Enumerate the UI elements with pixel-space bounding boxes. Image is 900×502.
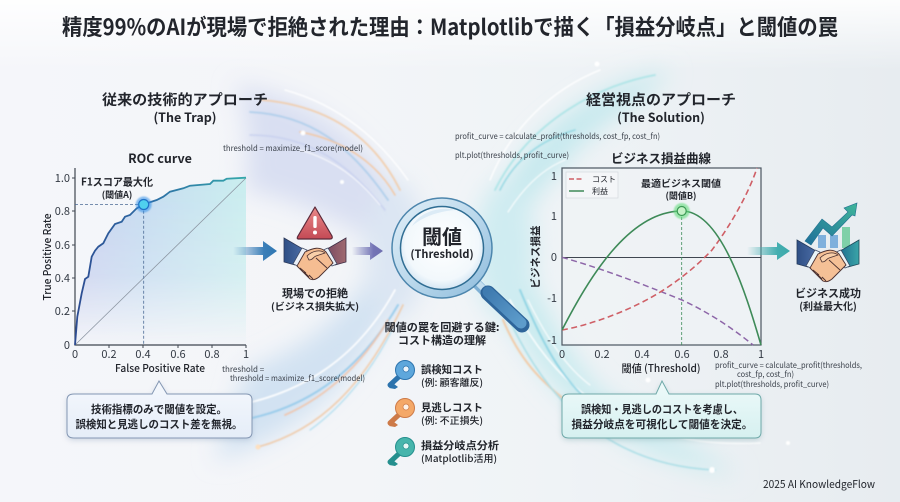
code note: threshold bottom: threshold = [222, 364, 265, 375]
arrow: to rejection [233, 241, 277, 261]
chart title: business profit curve: ビジネス損益曲線 [611, 148, 711, 167]
code note: profit top: profit_curve = calculate_profit(thresholds, cost_fp, cost_fn) [455, 131, 660, 142]
label: success: (利益最大化) [799, 298, 857, 313]
zero line [562, 256, 761, 258]
axis labels: 閾値 (Threshold) [622, 361, 700, 376]
key item: break-even analysis [389, 438, 500, 466]
code note: threshold top: threshold = maximize_f1_score(model) [223, 143, 363, 154]
icon: magnifying glass threshold: (Threshold) [410, 246, 474, 262]
optimum guide [681, 212, 683, 345]
annotation: threshold B: 最適ビジネス閾値 [641, 176, 722, 190]
profit chart: ビジネス損益 [528, 225, 543, 288]
callout: trap [67, 381, 252, 440]
ROC chart: True Positive Rate [40, 213, 55, 300]
label: rejection [271, 285, 359, 313]
ROC curve line [75, 178, 246, 345]
credit: 2025 AI KnowledgeFlow [763, 477, 876, 492]
legend: コスト [592, 174, 616, 185]
label: rejection: 現場での拒絶 [282, 285, 348, 301]
x ticks: 1 [758, 346, 764, 362]
marker: threshold B [674, 203, 690, 219]
icon: magnifying glass threshold [392, 198, 522, 325]
code note: threshold bottom: threshold = maximize_f1_score(model) [230, 373, 365, 384]
legend: 利益 [592, 186, 608, 197]
x ticks: 0.2 [101, 346, 117, 362]
code note: threshold bottom [222, 364, 365, 384]
marker: threshold A [136, 196, 152, 212]
x ticks: 1 [243, 346, 249, 362]
icon: blue key [389, 360, 414, 389]
code note: profit top [455, 131, 660, 161]
key item: break-even analysis: (Matplotlib活用) [421, 451, 497, 465]
heading: solution: 経営視点のアプローチ [586, 89, 736, 110]
axis labels: False Positive Rate [115, 361, 205, 376]
y ticks [55, 170, 70, 353]
x ticks: 0.6 [674, 346, 690, 362]
icon: teal key [389, 438, 414, 466]
icon: growth chart [805, 203, 857, 248]
code note: profit bottom: cost_fp, cost_fn) [737, 369, 794, 380]
callout: solution: 損益分岐点を可視化して閾値を決定。 [572, 416, 752, 432]
y ticks: 0 [64, 337, 70, 353]
red dashed cost curve [562, 168, 757, 330]
key item: false negative cost: 見逃しコスト [421, 400, 483, 415]
key item: false negative cost [389, 398, 483, 427]
x ticks: 0 [559, 346, 565, 362]
key item: break-even analysis: 損益分岐点分析 [421, 438, 500, 453]
icon: handshake success [797, 240, 859, 282]
icon: handshake rejection [284, 238, 346, 280]
key item: false positive cost [389, 360, 483, 389]
label: success: ビジネス成功 [795, 285, 861, 301]
heading: trap: (The Trap) [153, 107, 217, 126]
y ticks: 0.8 [55, 203, 70, 219]
purple dashed curve [562, 257, 753, 345]
key item: false positive cost: 誤検知コスト [421, 362, 483, 377]
x ticks: 0.8 [204, 346, 220, 362]
annotation: F1: F1スコア最大化 [81, 174, 153, 190]
callout: solution [562, 381, 761, 440]
key item: false positive cost: (例: 顧客離反) [421, 375, 483, 389]
handle [476, 283, 522, 325]
label: success [795, 285, 861, 313]
code note: profit top: plt.plot(thresholds, profit_curve) [455, 150, 569, 161]
green profit curve [562, 211, 761, 345]
legend [566, 172, 618, 198]
y ticks: -1 [547, 332, 557, 348]
y ticks: 0.2 [55, 303, 70, 319]
x ticks: 0.6 [170, 346, 186, 362]
y ticks: -1 [547, 290, 557, 306]
arrow: to threshold [352, 242, 383, 260]
y ticks: 0.6 [55, 237, 70, 253]
x ticks: 0.8 [713, 346, 729, 362]
area under ROC curve [78, 178, 246, 330]
annotation: F1: (閾値A) [102, 188, 132, 201]
heading: trap [102, 89, 268, 126]
diagonal [75, 178, 246, 345]
callout: solution: 誤検知・見逃しのコストを考慮し、 [581, 401, 743, 417]
arrow: to success [747, 242, 790, 260]
profit chart [528, 168, 764, 376]
heading: key to avoid trap: コスト構造の理解 [398, 332, 486, 348]
annotation: threshold B: (閾値B) [666, 189, 696, 202]
annotation: threshold B [641, 176, 722, 202]
x ticks [559, 346, 764, 362]
y ticks: 1 [551, 168, 557, 184]
callout: trap: 誤検知と見逃しのコスト差を無視。 [76, 416, 242, 432]
x ticks: 0 [72, 346, 78, 362]
chart title: ROC curve: ROC curve [128, 148, 192, 167]
icon: magnifying glass threshold: 閾値 [422, 221, 462, 250]
heading: key to avoid trap [384, 319, 500, 348]
dashed guides [75, 204, 144, 345]
heading: solution [586, 89, 736, 126]
x ticks: 0.4 [135, 346, 151, 362]
x ticks: 0.4 [634, 346, 650, 362]
axes [75, 168, 246, 345]
icon: warning triangle [297, 207, 332, 239]
code note: profit bottom: profit_curve = calculate_profit(thresholds, [715, 360, 862, 371]
code note: profit bottom [715, 360, 862, 390]
y ticks [547, 168, 557, 348]
title: 精度99%のAIが現場で拒絶された理由：Matplotlibで描く「損益分岐点」と閾値の罠 [62, 10, 838, 42]
heading: key to avoid trap: 閾値の罠を回避する鍵: [384, 319, 500, 335]
y ticks: 0 [551, 249, 557, 265]
icon: orange key [389, 398, 414, 427]
annotation: F1 [81, 174, 153, 201]
key item: false negative cost: (例: 不正損失) [421, 413, 483, 427]
x ticks [72, 346, 249, 362]
x ticks: 0.2 [594, 346, 610, 362]
y ticks: 1 [551, 208, 557, 224]
heading: solution: (The Solution) [617, 107, 705, 126]
y ticks: 1.0 [55, 170, 70, 186]
label: rejection: (ビジネス損失拡大) [271, 299, 359, 313]
ROC chart [40, 168, 249, 376]
callout: trap: 技術指標のみで閾値を設定。 [91, 401, 227, 417]
heading: trap: 従来の技術的アプローチ [102, 89, 268, 110]
y ticks: 0.4 [55, 270, 70, 286]
code note: profit bottom: plt.plot(thresholds, profit_curve) [715, 379, 829, 390]
